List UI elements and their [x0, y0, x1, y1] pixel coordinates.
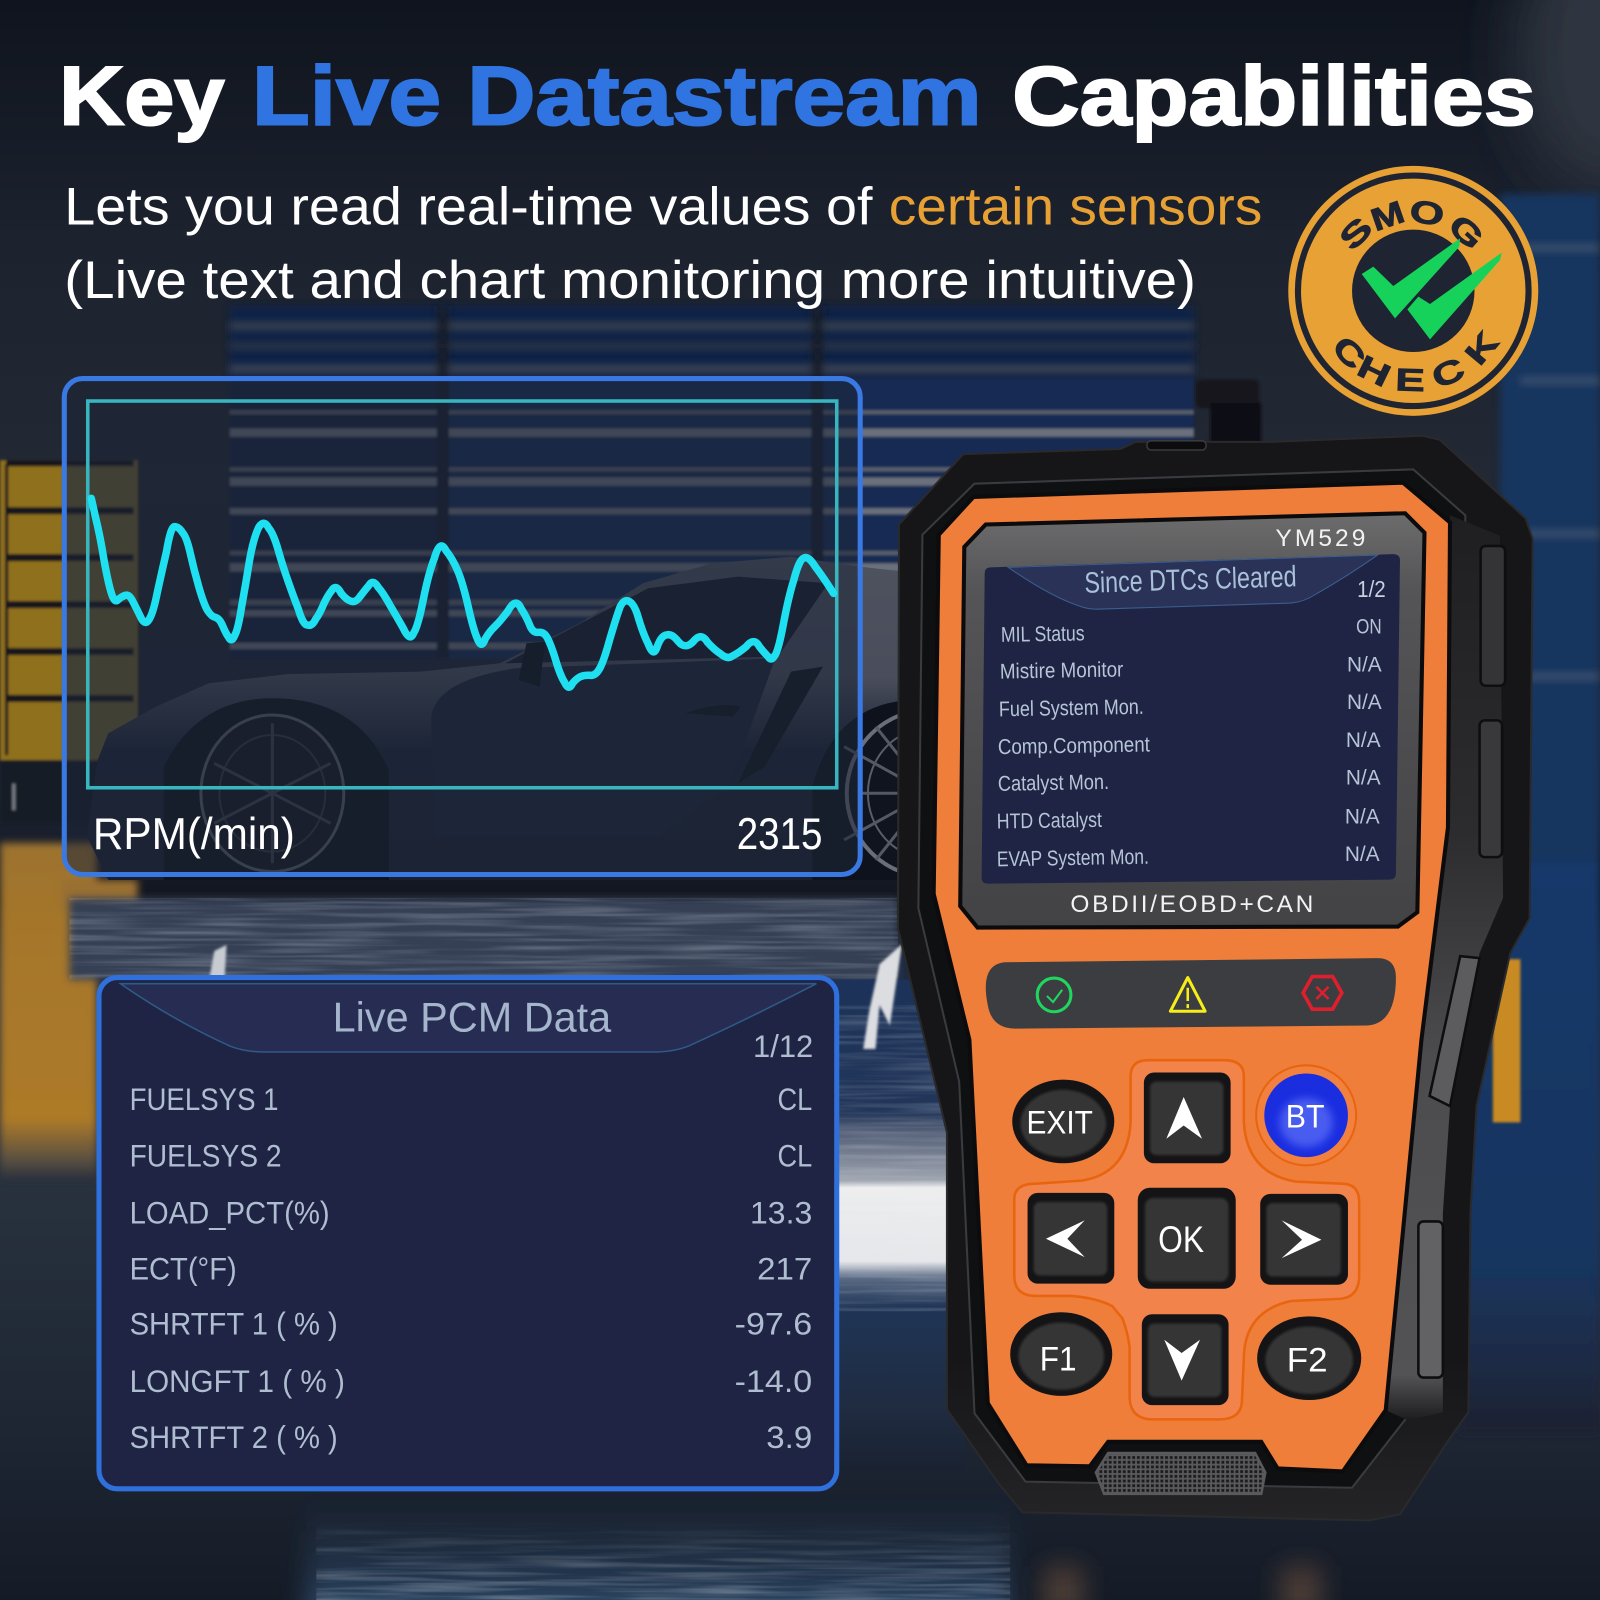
protocol label: OBDII/EOBD+CAN [1070, 891, 1313, 918]
table rows: LOAD_PCT(%) [130, 1194, 330, 1230]
screen row values [1345, 615, 1382, 866]
title: Capabilities [1012, 48, 1536, 142]
badge: smog check: E [1395, 362, 1426, 399]
button: F1: F1 [1040, 1340, 1077, 1378]
screen display [982, 554, 1400, 884]
button: BT: BT [1286, 1098, 1325, 1135]
screen bezel [960, 513, 1424, 928]
table rows: SHRTFT 2 ( % ) [130, 1419, 338, 1455]
button: EXIT [1012, 1080, 1114, 1163]
table rows: LONGFT 1 ( % ) [130, 1363, 345, 1399]
table rows: 217 [757, 1251, 812, 1287]
badge: smog check: C [1325, 329, 1373, 377]
chart frame [88, 401, 837, 788]
table rows: 13.3 [750, 1194, 812, 1230]
screen row values: N/A [1345, 804, 1380, 828]
screen row values: N/A [1345, 842, 1380, 866]
badge: smog check [1288, 166, 1538, 416]
indicator light strip [986, 958, 1396, 1029]
screen row values: N/A [1347, 652, 1382, 676]
screen row values: N/A [1346, 728, 1381, 752]
badge: smog check: G [1441, 208, 1491, 257]
background: parked car [87, 557, 1011, 880]
panel: RPM live chart [64, 379, 860, 874]
device side grips [1418, 546, 1505, 1378]
button: F2 [1257, 1316, 1361, 1400]
icon: red error [1303, 977, 1342, 1009]
icon: yellow warning [1170, 978, 1205, 1011]
title: Key [59, 48, 225, 142]
table rows: FUELSYS 2 [130, 1137, 282, 1173]
device orange faceplate [934, 483, 1450, 1471]
table rows: SHRTFT 1 ( % ) [130, 1306, 338, 1342]
table rows: ECT(°F) [130, 1251, 237, 1287]
screen row labels [997, 621, 1150, 871]
badge: smog check: O [1407, 193, 1447, 234]
page number: 1/12 [753, 1028, 813, 1064]
screen page number: 1/2 [1357, 576, 1386, 602]
button: down arrow [1142, 1314, 1229, 1405]
screen row labels: Mistire Monitor [1000, 657, 1124, 684]
screen row values: N/A [1347, 690, 1382, 714]
background: right blue cabinet [1459, 194, 1600, 1434]
button: up arrow [1144, 1072, 1231, 1163]
subtitle: Lets you read real-time values of [64, 177, 873, 236]
title [59, 48, 1536, 142]
screen row labels: EVAP System Mon. [997, 845, 1149, 871]
badge: smog check: K [1458, 325, 1506, 372]
button: right arrow [1260, 1194, 1348, 1285]
badge: smog check: H [1352, 349, 1396, 394]
device cable connector [1196, 380, 1261, 448]
keypad grooves [1014, 1060, 1359, 1419]
line chart: RPM trace [91, 498, 834, 687]
device inner edge [918, 469, 1465, 1488]
chart value: 2315 [737, 808, 822, 859]
screen row values: N/A [1346, 766, 1381, 790]
button: F1 [1010, 1312, 1112, 1396]
table title: Live PCM Data [333, 994, 612, 1041]
screen title: Since DTCs Cleared [1084, 560, 1297, 600]
screen row labels: Comp.Component [998, 732, 1150, 759]
screen row labels: Catalyst Mon. [998, 770, 1109, 796]
button: OK [1138, 1188, 1236, 1289]
button: F2: F2 [1287, 1341, 1328, 1379]
button: OK: OK [1158, 1219, 1205, 1260]
device: OBD2 scanner [898, 380, 1533, 1520]
panel: Live PCM Data [99, 978, 837, 1489]
badge: smog check: S [1332, 209, 1380, 257]
subtitle: (Live text and chart monitoring more intuitive) [64, 251, 1196, 310]
table rows: FUELSYS 1 [130, 1081, 279, 1117]
table rows: -14.0 [735, 1363, 812, 1399]
subtitle [64, 177, 1262, 310]
device top slot [1147, 441, 1206, 450]
table rows [130, 1081, 812, 1455]
badge: smog check: C [1427, 351, 1470, 396]
table rows: -97.6 [735, 1306, 812, 1342]
table rows: CL [778, 1081, 812, 1117]
table header band [120, 984, 816, 1052]
screen row values: ON [1356, 615, 1382, 639]
screen row labels: Fuel System Mon. [999, 695, 1144, 721]
button: left arrow [1028, 1193, 1114, 1284]
screen row labels: MIL Status [1001, 621, 1085, 647]
badge: smog check: M [1366, 194, 1409, 238]
background: floor reflections [0, 843, 1520, 1600]
icon: green check [1037, 978, 1071, 1012]
table rows: CL [778, 1137, 812, 1173]
icon: double check mark [1362, 238, 1502, 339]
button: EXIT: EXIT [1027, 1104, 1093, 1141]
screen header band [1008, 555, 1378, 609]
subtitle: certain sensors [889, 177, 1262, 236]
model label: YM529 [1276, 525, 1365, 552]
table rows: 3.9 [766, 1419, 812, 1455]
title: Live Datastream [252, 48, 982, 142]
screen row labels: HTD Catalyst [997, 808, 1102, 834]
device body [898, 436, 1533, 1520]
chart label: RPM(/min) [93, 808, 295, 859]
button: BT [1256, 1065, 1356, 1165]
speaker grille [1096, 1453, 1265, 1494]
background: yellow cabinet [0, 460, 138, 823]
device right rail [1386, 515, 1503, 1420]
